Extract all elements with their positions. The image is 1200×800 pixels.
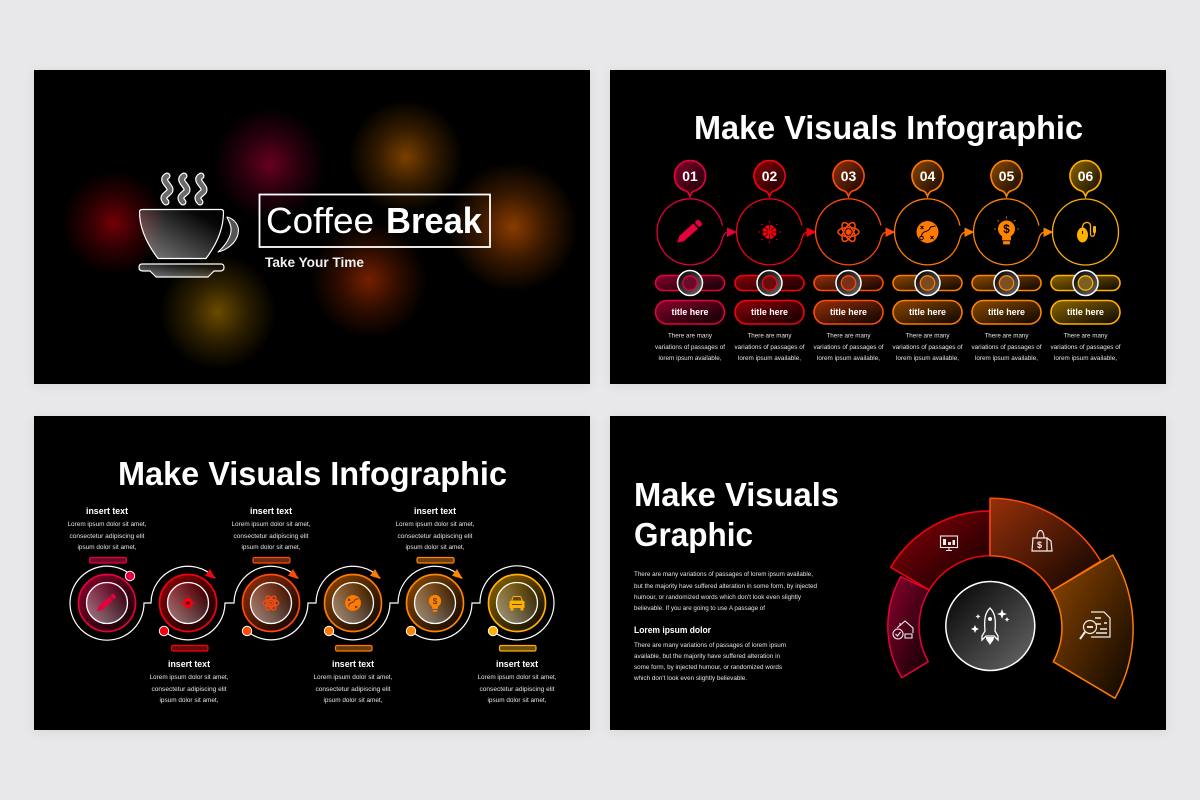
step 05: title here	[988, 307, 1025, 317]
subheading: Lorem ipsum dolor	[634, 625, 711, 636]
step 02	[734, 161, 816, 362]
step 06: variations of passages of	[1050, 344, 1121, 351]
item 5: Lorem ipsum dolor sit amet,	[396, 521, 475, 528]
body paragraph: humour, or randomized words which don't look even slightly	[634, 594, 802, 601]
step 01: 01	[682, 169, 698, 184]
step 02: 02	[762, 169, 777, 184]
body paragraph: but the majority have suffered alteration in some form, by injected	[634, 583, 817, 590]
heading: Make Visuals Infographic	[118, 456, 507, 493]
heading: Graphic	[634, 517, 753, 554]
second paragraph: which don't look even slightly believable.	[633, 675, 747, 682]
item 3: insert text	[250, 506, 292, 516]
step 06: lorem ipsum available,	[1054, 355, 1117, 362]
step 05	[972, 161, 1054, 362]
step 02: lorem ipsum available,	[738, 355, 801, 362]
glowing bokeh background	[62, 100, 578, 370]
icon: report with magnifier	[1080, 612, 1110, 639]
step 06: There are many	[1064, 332, 1108, 340]
step 06: title here	[1067, 307, 1104, 317]
step 02: title here	[751, 307, 788, 317]
step 05: 05	[999, 169, 1015, 184]
panel: winding timeline slide	[34, 416, 590, 730]
icon: strategy plan	[916, 221, 938, 243]
icon: coffee cup with steam	[139, 176, 238, 277]
item 3: ipsum dolor sit amet,	[242, 544, 301, 551]
icon: idea bulb: $	[433, 597, 438, 606]
item 6: ipsum dolor sit amet,	[488, 697, 547, 704]
step 05: lorem ipsum available,	[975, 355, 1038, 362]
second paragraph: available, but the majority have suffered alteration in	[634, 653, 780, 660]
panel: six step process slide	[610, 70, 1166, 384]
step 04: title here	[909, 307, 946, 317]
winding white path	[70, 566, 554, 640]
step 02: variations of passages of	[734, 344, 805, 351]
center circle with rocket	[946, 582, 1035, 670]
step 06: 06	[1078, 169, 1094, 184]
second paragraph: There are many variations of passages of lorem ipsum	[634, 642, 786, 649]
step 03: title here	[830, 307, 867, 317]
icon: idea bulb with dollar	[994, 216, 1019, 244]
icon: strategy plan	[345, 595, 361, 611]
icon: atom	[838, 221, 859, 243]
icon: target wheel	[180, 595, 196, 611]
step 04: There are many	[906, 332, 950, 340]
second paragraph: some form, by injected humour, or randomized words	[634, 664, 782, 671]
item 4: consectetur adipiscing elit	[316, 686, 391, 693]
segment 1: crimson	[888, 577, 929, 678]
item 1: consectetur adipiscing elit	[70, 533, 145, 540]
panel: radial graphic slide	[610, 416, 1166, 730]
icon: house check	[893, 621, 913, 639]
item 4	[314, 569, 393, 704]
title box: coffee break: Coffee	[266, 200, 374, 241]
item 2	[150, 569, 229, 704]
item 5: ipsum dolor sit amet,	[406, 544, 465, 551]
chart: radial segments	[888, 498, 1133, 698]
step 01: variations of passages of	[655, 344, 725, 351]
item 4: Lorem ipsum dolor sit amet,	[314, 674, 393, 681]
segment 4: orange	[1052, 555, 1133, 698]
step 04: variations of passages of	[892, 344, 963, 351]
second paragraph	[633, 642, 786, 682]
step 05: There are many	[984, 332, 1029, 340]
segment 2: red	[891, 511, 990, 590]
icon: shopping bag	[1032, 530, 1052, 551]
heading	[634, 477, 839, 554]
panel: coffee break slide	[34, 70, 590, 384]
body paragraph: believable. If you are going to use A passage of	[634, 605, 765, 612]
title box: coffee break	[260, 194, 490, 247]
icon: car	[510, 596, 524, 610]
item 3: Lorem ipsum dolor sit amet,	[232, 521, 311, 528]
step 01: There are many	[668, 332, 713, 340]
icon: rocket	[971, 608, 1010, 645]
step 03: 03	[841, 169, 857, 184]
title box: coffee break: Break	[386, 200, 483, 241]
item 5: consectetur adipiscing elit	[398, 533, 473, 540]
icon: monitor chart	[940, 536, 958, 550]
item 5: insert text	[414, 506, 456, 516]
step 03	[814, 161, 896, 362]
step 06	[1050, 161, 1121, 362]
icon: ship wheel	[758, 221, 780, 243]
subtitle: Take Your Time	[265, 255, 364, 270]
step 01: lorem ipsum available,	[658, 355, 722, 362]
step 03: lorem ipsum available,	[817, 355, 880, 362]
item 1: Lorem ipsum dolor sit amet,	[68, 521, 147, 528]
item 4: ipsum dolor sit amet,	[324, 697, 383, 704]
step 03: There are many	[826, 332, 871, 340]
item 2: consectetur adipiscing elit	[152, 686, 227, 693]
item 4: insert text	[332, 659, 374, 669]
item 3: consectetur adipiscing elit	[234, 533, 309, 540]
item 1: insert text	[86, 506, 128, 516]
body paragraph	[634, 571, 817, 612]
item 2: ipsum dolor sit amet,	[160, 697, 219, 704]
heading: Make Visuals Infographic	[694, 110, 1083, 147]
item 6: consectetur adipiscing elit	[480, 686, 555, 693]
step 01: title here	[672, 307, 708, 317]
icon: idea bulb with dollar: $	[1003, 224, 1010, 236]
step 04	[892, 161, 974, 362]
item 6	[478, 574, 557, 704]
item 1	[68, 506, 147, 632]
item 6: insert text	[496, 659, 538, 669]
step 01	[655, 161, 737, 362]
item 2: insert text	[168, 659, 210, 669]
item 5	[396, 506, 475, 636]
item 1: ipsum dolor sit amet,	[78, 544, 137, 551]
body paragraph: There are many variations of passages of lorem ipsum available,	[634, 571, 813, 578]
step 02: There are many	[748, 332, 792, 340]
item 6: Lorem ipsum dolor sit amet,	[478, 674, 557, 681]
segment 3: orange red	[990, 498, 1101, 591]
icon: shopping bag: $	[1037, 540, 1042, 550]
step 04: lorem ipsum available,	[896, 355, 959, 362]
heading: Make Visuals	[634, 477, 839, 514]
icon: computer mouse	[1077, 222, 1096, 242]
item 2: Lorem ipsum dolor sit amet,	[150, 674, 229, 681]
step 05: variations of passages of	[972, 344, 1042, 351]
item 3	[232, 506, 311, 636]
icon: pencil	[95, 593, 116, 613]
step 03: variations of passages of	[814, 344, 884, 351]
icon: pencil	[675, 219, 703, 245]
icon: atom	[263, 594, 279, 612]
step 04: 04	[920, 169, 936, 184]
